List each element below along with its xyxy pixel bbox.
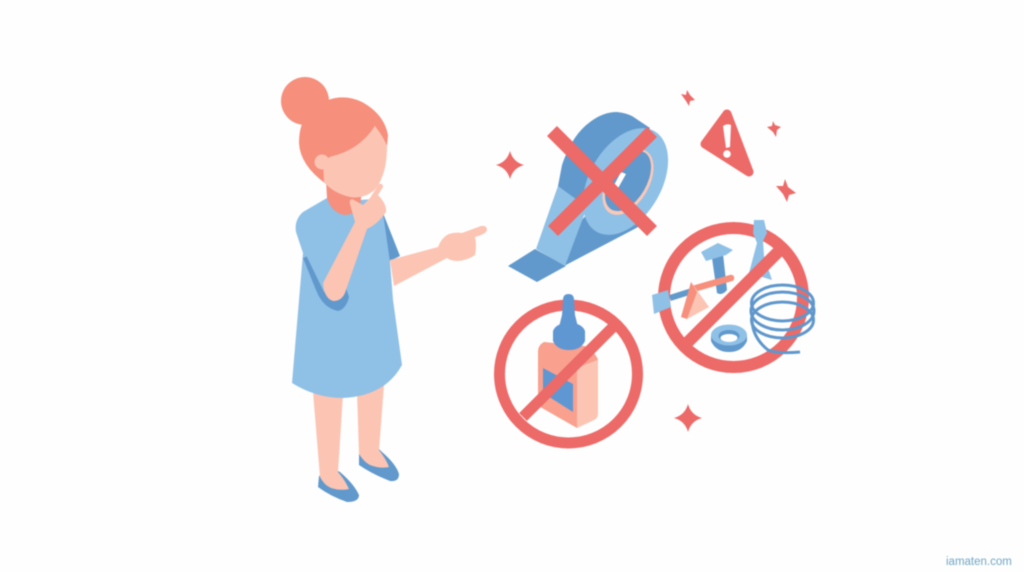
nozzle <box>559 294 578 327</box>
coiled wire <box>751 285 814 353</box>
left shoe <box>318 470 359 502</box>
prohibition ring <box>500 305 638 443</box>
pointing arm <box>390 226 487 286</box>
tape base <box>508 249 566 282</box>
dispenser lower side <box>564 200 640 266</box>
pink wedge <box>687 282 709 319</box>
face <box>323 126 387 197</box>
tape hole <box>595 143 661 219</box>
red X <box>552 131 652 231</box>
cap <box>553 323 585 350</box>
dark sleeve behind dress <box>375 213 400 262</box>
pink rod <box>693 278 731 289</box>
washer <box>711 324 747 352</box>
figure: thinking woman <box>281 77 487 502</box>
watermark: iamaten.com <box>946 556 1012 568</box>
star: right of warning <box>767 121 781 137</box>
prohibition slash <box>523 327 613 417</box>
star: below warning <box>776 179 796 202</box>
neck shadow hair <box>326 180 362 215</box>
hair bun <box>281 77 329 125</box>
prohibition slash <box>688 252 778 342</box>
roll front face <box>565 113 686 250</box>
dark sleeve hem <box>303 256 349 311</box>
right shoe <box>359 449 399 481</box>
dress <box>292 198 402 398</box>
prohibition ring <box>664 228 803 367</box>
roll outer side <box>558 112 650 215</box>
sleeve cover <box>296 215 360 292</box>
hair <box>299 97 388 184</box>
hammer handle <box>712 254 727 294</box>
screwdriver <box>749 220 772 280</box>
icon: warning triangle <box>705 114 749 172</box>
right leg and foot <box>357 385 389 468</box>
bottle label <box>543 368 573 412</box>
hammer head <box>701 243 733 261</box>
icon: crossed-out tape dispenser <box>508 112 686 282</box>
star: bottom <box>674 404 702 432</box>
ear <box>314 154 330 170</box>
blue shaft <box>670 291 692 298</box>
star: left of tape <box>496 151 524 179</box>
dispenser light arm <box>536 180 588 266</box>
hole highlight <box>613 172 626 190</box>
bottle right face <box>577 360 598 428</box>
chisel handle <box>652 290 671 314</box>
icon: prohibited tools <box>652 220 814 367</box>
left leg and foot <box>313 392 349 490</box>
tape core ring <box>592 140 664 224</box>
bottle left face <box>538 342 577 428</box>
icon: prohibited glue bottle <box>500 294 638 443</box>
bottle top face <box>544 342 598 368</box>
thinking arm <box>323 184 386 301</box>
exclamation mark <box>723 124 731 158</box>
star: top <box>681 90 695 106</box>
